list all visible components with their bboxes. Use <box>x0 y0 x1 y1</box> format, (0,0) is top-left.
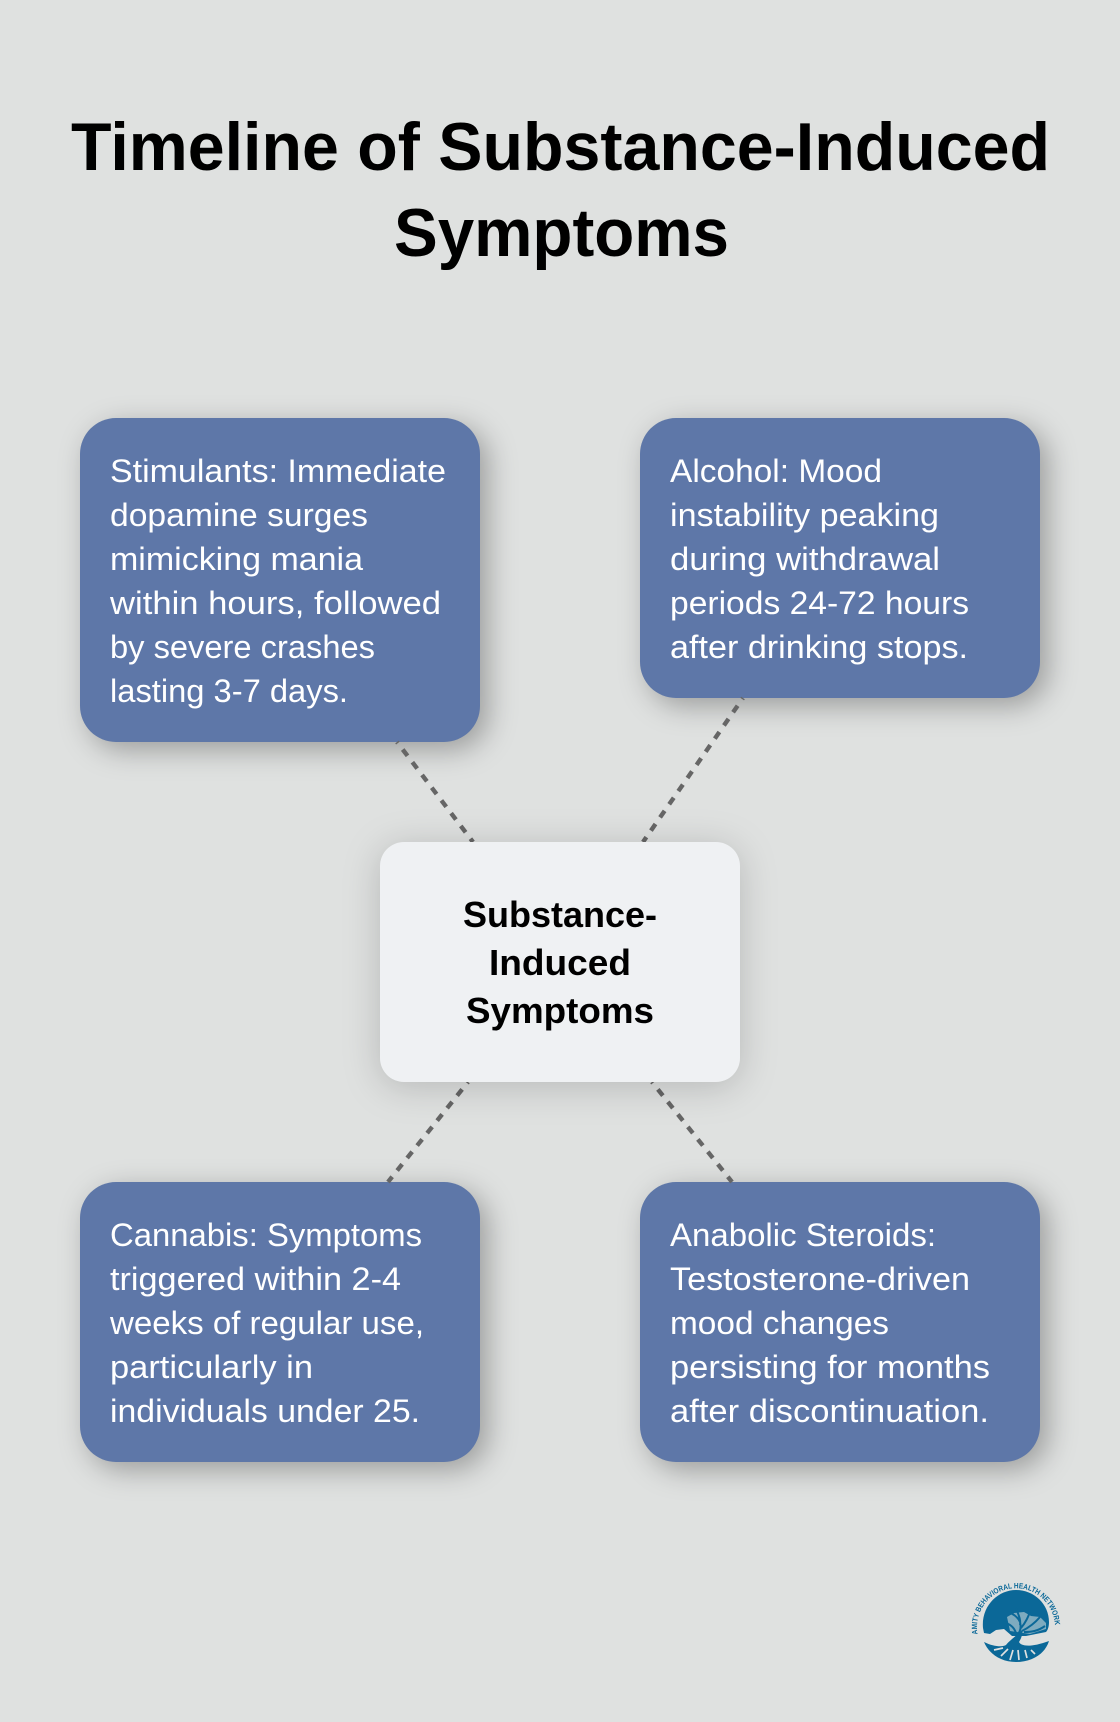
panel: stimulants: mimicking mania <box>110 541 363 577</box>
panel: cannabis: particularly in <box>110 1349 313 1385</box>
panel: cannabis: triggered within 2-4 <box>110 1261 401 1297</box>
panel: alcohol: during withdrawal <box>670 541 940 577</box>
title <box>71 109 1050 271</box>
icon: Amity Behavioral Health Network logo: AMITY BEHAVIORAL HEALTH NETWORK <box>972 1583 1060 1634</box>
panel: alcohol: Alcohol: Mood <box>670 453 882 489</box>
panel: stimulants: by severe crashes <box>110 629 375 665</box>
panel: anabolic steroids <box>640 1182 1040 1462</box>
panel: alcohol: periods 24-72 hours <box>670 585 969 621</box>
panel: cannabis <box>80 1182 480 1462</box>
panel: anabolic steroids: mood changes <box>670 1305 889 1341</box>
dashed connectors from the central node to the four cards <box>388 698 743 1182</box>
panel: central node <box>380 842 740 1082</box>
panel: anabolic steroids: after discontinuation. <box>670 1393 989 1429</box>
panel: anabolic steroids: persisting for months <box>670 1349 990 1385</box>
panel: alcohol: after drinking stops. <box>670 629 968 665</box>
panel: central node: Induced <box>489 942 631 983</box>
panel: cannabis: Cannabis: Symptoms <box>110 1217 422 1253</box>
panel: stimulants <box>80 418 480 742</box>
panel: central node: Symptoms <box>466 990 654 1031</box>
icon: Amity Behavioral Health Network logo <box>972 1583 1060 1662</box>
panel: anabolic steroids: Testosterone-driven <box>670 1261 970 1297</box>
panel: alcohol: instability peaking <box>670 497 939 533</box>
panel: anabolic steroids: Anabolic Steroids: <box>670 1217 936 1253</box>
panel: stimulants: lasting 3-7 days. <box>110 673 348 709</box>
title: Timeline of Substance-Induced <box>71 109 1050 185</box>
panel: central node: Substance- <box>463 894 657 935</box>
panel: cannabis: individuals under 25. <box>110 1393 420 1429</box>
panel: stimulants: within hours, followed <box>109 585 441 621</box>
panel: stimulants: Stimulants: Immediate <box>110 453 446 489</box>
panel: cannabis: weeks of regular use, <box>109 1305 424 1341</box>
panel: alcohol <box>640 418 1040 698</box>
panel: stimulants: dopamine surges <box>110 497 368 533</box>
title: Symptoms <box>394 195 729 271</box>
